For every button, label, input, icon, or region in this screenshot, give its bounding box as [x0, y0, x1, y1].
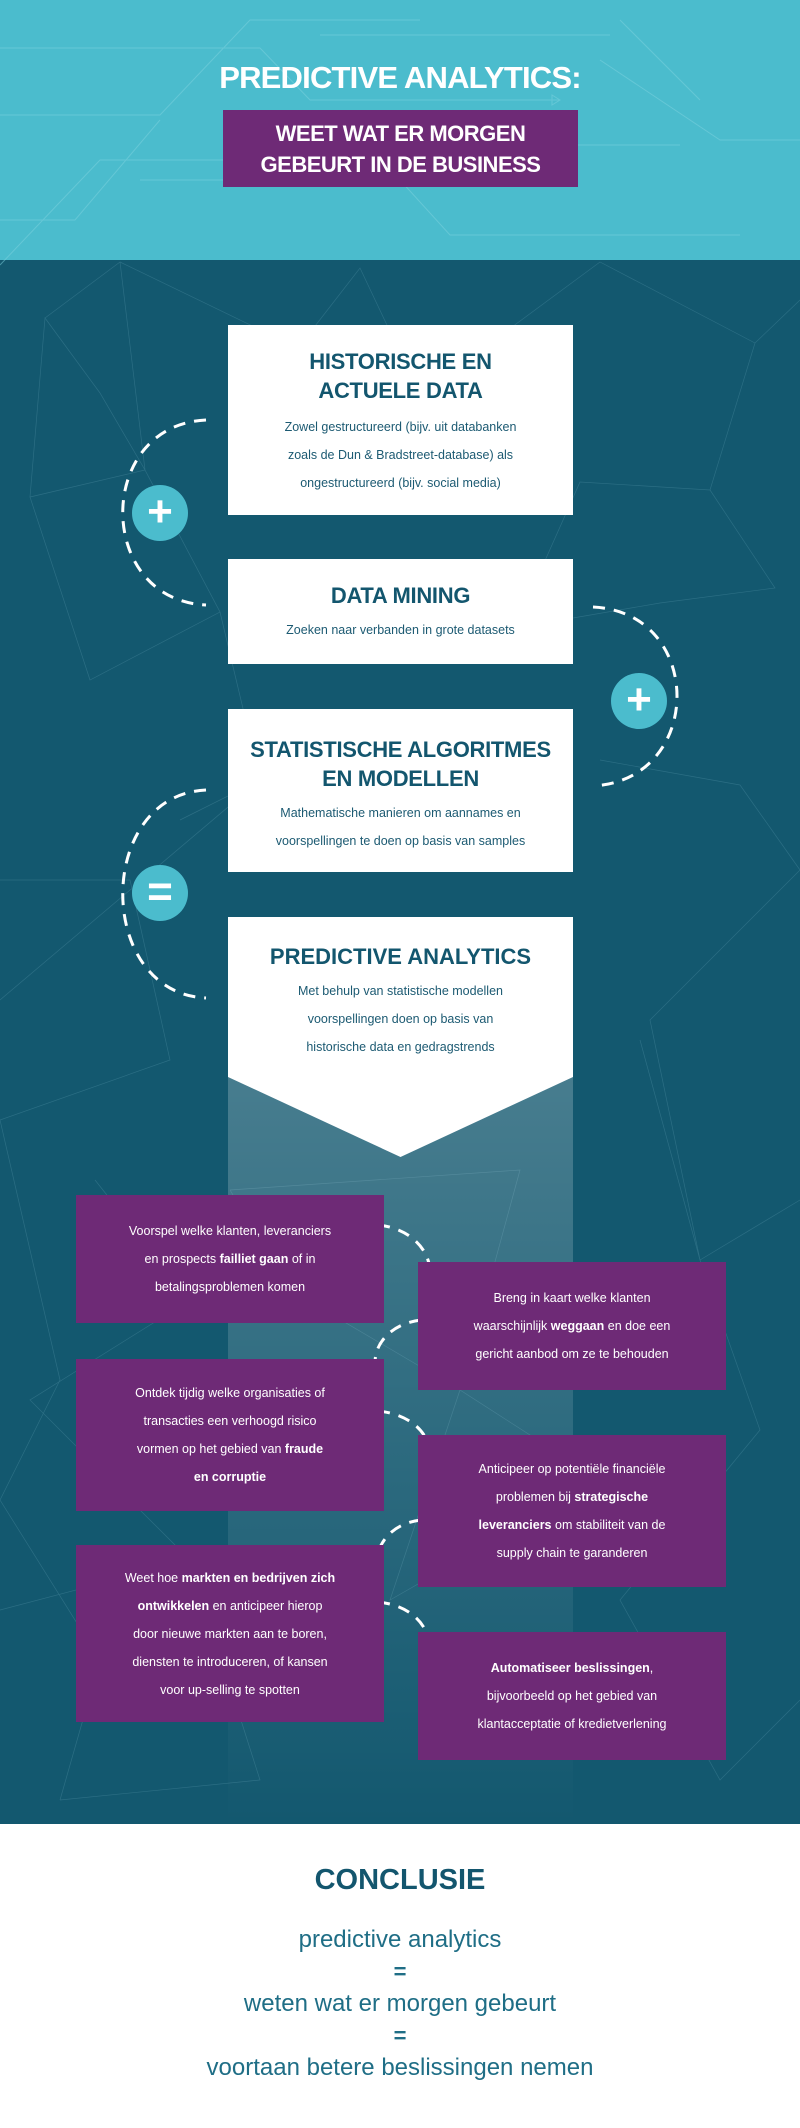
panel: weggaan	[418, 1262, 726, 1390]
panel: predictive analytics chevron: historische data en gedragstrends	[306, 1040, 495, 1054]
subtitle box	[223, 110, 578, 187]
panel: automatiseer: Automatiseer beslissingen,	[491, 1661, 653, 1675]
conclusion text: weten wat er morgen gebeurt	[244, 1990, 556, 2017]
panel: historische data: HISTORISCHE EN	[309, 349, 492, 374]
icon: equals: =	[147, 867, 173, 916]
panel: automatiseer	[418, 1632, 726, 1760]
panel: weggaan: waarschijnlijk weggaan en doe een	[474, 1319, 670, 1333]
panel: markten: diensten te introduceren, of kansen	[132, 1654, 328, 1668]
icon: plus 1: +	[147, 487, 173, 536]
panel: automatiseer: bijvoorbeeld op het gebied van	[487, 1689, 657, 1703]
panel: weggaan: Breng in kaart welke klanten	[493, 1291, 651, 1305]
panel: predictive analytics chevron	[228, 917, 573, 1157]
panel: historische data: Zowel gestructureerd (bijv. uit databanken	[285, 420, 516, 434]
panel: markten: voor up-selling te spotten	[160, 1682, 300, 1696]
panel: predictive analytics chevron: voorspellingen doen op basis van	[308, 1012, 493, 1026]
panel: fraude: en corruptie	[194, 1470, 266, 1484]
panel: fraude: transacties een verhoogd risico	[143, 1414, 316, 1428]
panel: historische data: zoals de Dun & Bradstreet-database) als	[288, 448, 513, 462]
panel: statistische algoritmes: voorspellingen te doen op basis van samples	[276, 834, 525, 848]
subtitle box: WEET WAT ER MORGEN	[276, 121, 525, 146]
panel: statistische algoritmes: STATISTISCHE ALGORITMES	[250, 737, 551, 762]
panel: automatiseer: klantacceptatie of kredietverlening	[477, 1717, 666, 1731]
panel: leveranciers	[418, 1435, 726, 1587]
panel: markten: ontwikkelen en anticipeer hierop	[138, 1598, 322, 1612]
panel: leveranciers: problemen bij strategische	[496, 1490, 648, 1504]
conclusion text	[206, 1926, 593, 2081]
panel: weggaan: gericht aanbod om ze te behouden	[475, 1347, 669, 1361]
title: PREDICTIVE ANALYTICS:	[219, 60, 581, 95]
panel: fraude: vormen op het gebied van fraude	[137, 1442, 323, 1456]
conclusion text: =	[394, 1959, 406, 1984]
panel: data mining	[228, 559, 573, 664]
panel: statistische algoritmes: EN MODELLEN	[322, 766, 479, 791]
panel: data mining: DATA MINING	[331, 583, 470, 608]
conclusion text: =	[394, 2023, 406, 2048]
panel: historische data: ACTUELE DATA	[318, 378, 483, 403]
panel: faillissement: betalingsproblemen komen	[155, 1280, 305, 1294]
panel: fraude	[76, 1359, 384, 1511]
panel: data mining: Zoeken naar verbanden in grote datasets	[286, 623, 515, 637]
panel: leveranciers: Anticipeer op potentiële financiële	[479, 1462, 665, 1476]
icon: plus 2: +	[626, 675, 652, 724]
light column	[228, 1077, 573, 1824]
panel: statistische algoritmes: Mathematische manieren om aannames en	[280, 806, 521, 820]
conclusion text: predictive analytics	[299, 1926, 501, 1953]
conclusion text: voortaan betere beslissingen nemen	[207, 2054, 593, 2081]
panel: predictive analytics chevron: PREDICTIVE ANALYTICS	[270, 944, 531, 969]
panel: faillissement: en prospects failliet gaan of in	[145, 1252, 315, 1266]
icon: plus 2	[611, 673, 667, 729]
subtitle box: GEBEURT IN DE BUSINESS	[261, 152, 540, 177]
icon: plus 1	[132, 485, 188, 541]
panel: fraude: Ontdek tijdig welke organisaties of	[135, 1386, 325, 1400]
icon: equals	[132, 865, 188, 921]
panel: historische data: ongestructureerd (bijv. social media)	[300, 476, 501, 490]
panel: faillissement	[76, 1195, 384, 1323]
panel: statistische algoritmes	[228, 709, 573, 872]
panel: historische data	[228, 325, 573, 515]
panel: markten	[76, 1545, 384, 1722]
panel: markten: Weet hoe markten en bedrijven zich	[125, 1570, 335, 1584]
panel: leveranciers: leveranciers om stabiliteit van de	[479, 1518, 665, 1532]
conclusion heading: CONCLUSIE	[315, 1864, 485, 1896]
panel: markten: door nieuwe markten aan te boren,	[133, 1626, 327, 1640]
panel: leveranciers: supply chain te garanderen	[497, 1546, 647, 1560]
panel: faillissement: Voorspel welke klanten, leveranciers	[129, 1224, 331, 1238]
panel: predictive analytics chevron: Met behulp van statistische modellen	[298, 984, 503, 998]
